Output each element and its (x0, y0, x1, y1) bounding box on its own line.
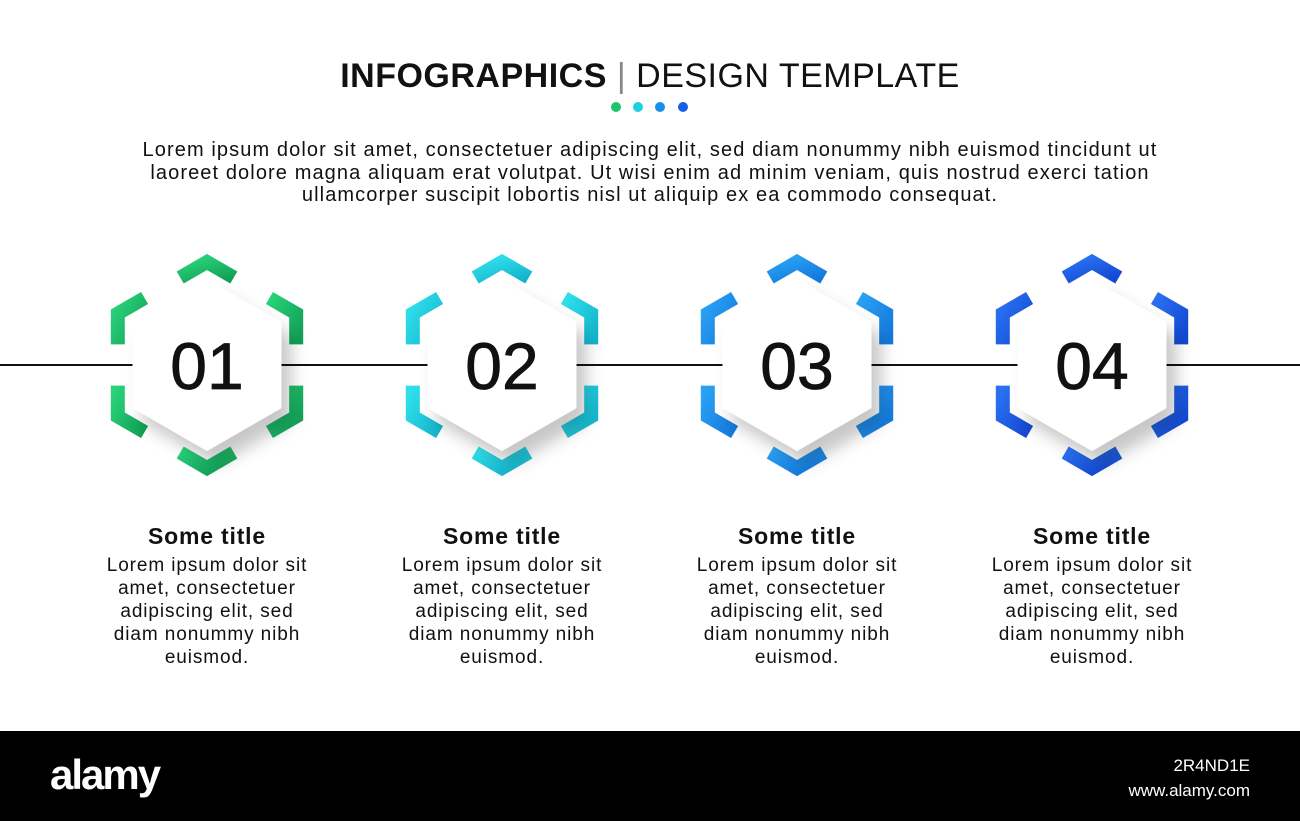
step 4 text: diam nonummy nibh (999, 624, 1185, 645)
step 1 text: amet, consectetuer (118, 578, 296, 599)
step 1 text: adipiscing elit, sed (120, 601, 294, 622)
intro paragraph: ullamcorper suscipit lobortis nisl ut aliquip ex ea commodo consequat. (302, 184, 998, 206)
step 2 text: diam nonummy nibh (409, 624, 595, 645)
step 3 text: Lorem ipsum dolor sit (697, 555, 897, 576)
intro paragraph: Lorem ipsum dolor sit amet, consectetuer adipiscing elit, sed diam nonummy nibh euismod tincidunt ut (143, 139, 1157, 161)
hexagon 03 (708, 262, 886, 468)
footer id (1128, 756, 1250, 800)
step 3 text: euismod. (755, 647, 839, 668)
step 2 text: adipiscing elit, sed (415, 601, 589, 622)
step 3 text: diam nonummy nibh (704, 624, 890, 645)
step 2 text: Lorem ipsum dolor sit (402, 555, 602, 576)
step 1 text: Lorem ipsum dolor sit (107, 555, 307, 576)
step 4 text: euismod. (1050, 647, 1134, 668)
title dots (611, 102, 688, 112)
step 1 text: euismod. (165, 647, 249, 668)
step 1 text: Some title (148, 523, 266, 549)
step 4 text: amet, consectetuer (1003, 578, 1181, 599)
hexagon 02 (413, 262, 591, 468)
hexagon 01 (118, 262, 296, 468)
step 3 text: Some title (738, 523, 856, 549)
footer id: www.alamy.com (1128, 781, 1250, 800)
hexagon 01: 01 (170, 329, 244, 403)
step 4 text: Some title (1033, 523, 1151, 549)
step 2 text: amet, consectetuer (413, 578, 591, 599)
footer id: 2R4ND1E (1173, 756, 1250, 775)
footer logo: alamy (50, 751, 159, 798)
intro paragraph: laoreet dolore magna aliquam erat volutpat. Ut wisi enim ad minim veniam, quis nostrud exerci tation (150, 162, 1150, 184)
step 2 text (402, 523, 602, 668)
hexagon 04 (1003, 262, 1181, 468)
step 4 text: Lorem ipsum dolor sit (992, 555, 1192, 576)
hexagon 02: 02 (465, 329, 539, 403)
footer bar (0, 731, 1300, 821)
step 3 text (697, 523, 897, 668)
step 3 text: adipiscing elit, sed (710, 601, 884, 622)
step 2 text: Some title (443, 523, 561, 549)
step 4 text: adipiscing elit, sed (1005, 601, 1179, 622)
intro paragraph (143, 139, 1157, 206)
hexagon 04: 04 (1055, 329, 1129, 403)
step 3 text: amet, consectetuer (708, 578, 886, 599)
step 2 text: euismod. (460, 647, 544, 668)
step 1 text (107, 523, 307, 668)
step 1 text: diam nonummy nibh (114, 624, 300, 645)
title: INFOGRAPHICS | DESIGN TEMPLATE (340, 57, 960, 95)
hexagon 03: 03 (760, 329, 834, 403)
step 4 text (992, 523, 1192, 668)
